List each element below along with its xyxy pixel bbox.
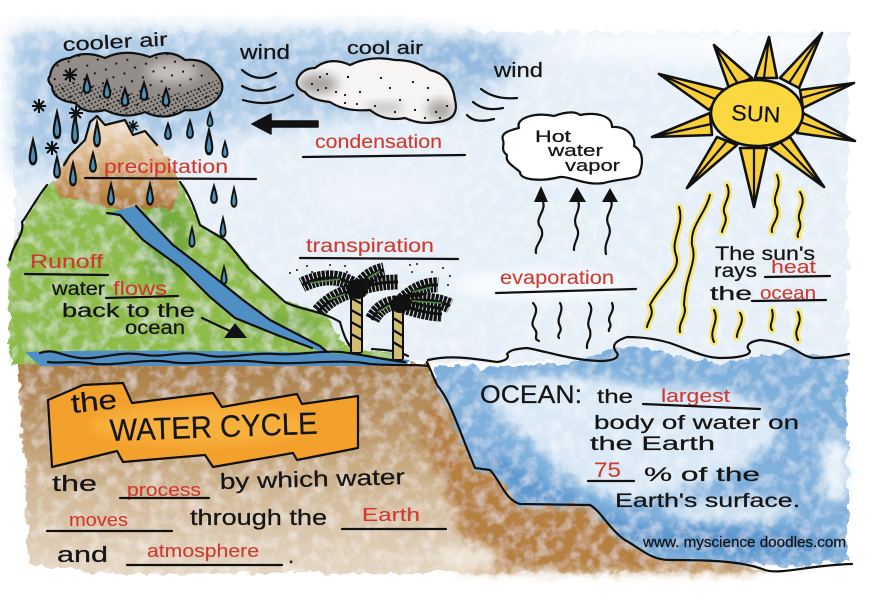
- text: water cycle definition: moves: [69, 510, 128, 530]
- panel: green mountain: [8, 116, 408, 366]
- text: the sun's rays heat the ocean: The sun's: [715, 244, 815, 265]
- text: the sun's rays heat the ocean: heat: [771, 257, 816, 277]
- text: the sun's rays heat the ocean: [710, 244, 830, 305]
- icon: palm trees: [289, 263, 451, 360]
- panel: ocean: [427, 337, 852, 571]
- text: water cycle definition: through the: [190, 505, 327, 530]
- text: water cycle definition: by which water: [219, 464, 405, 494]
- icon: wind lines right: [467, 89, 517, 121]
- palm trunk right: [393, 308, 403, 360]
- arrow: runoff direction: [202, 318, 247, 338]
- text: sun: SUN: [731, 100, 781, 128]
- text: water cycle definition: Earth: [362, 505, 420, 525]
- text: water flows back to the ocean: water: [51, 279, 106, 300]
- text: water cycle definition: .: [288, 543, 294, 568]
- text: the sun's rays heat the ocean: ocean: [760, 283, 816, 303]
- label: evaporation: evaporation: [500, 268, 614, 289]
- text: water cycle definition: and: [57, 542, 108, 567]
- text: ocean definition: the Earth: [590, 434, 715, 455]
- river: [107, 206, 330, 355]
- text: ocean definition: the: [597, 387, 633, 408]
- panel: soil: [18, 364, 770, 574]
- banner heading small: the: [69, 384, 118, 419]
- text: water flows back to the ocean: ocean: [125, 318, 185, 339]
- text: the sun's rays heat the ocean: rays: [714, 261, 757, 282]
- icon: sun heat rays: [647, 175, 803, 342]
- text: water cycle definition: process: [127, 480, 201, 500]
- text: the sun's rays heat the ocean: the: [710, 284, 752, 305]
- banner heading: WATER CYCLE: [109, 406, 318, 448]
- text: ocean definition: body of water on: [594, 413, 799, 434]
- icon: water vapor cloud: [503, 112, 642, 184]
- label: precipitation: precipitation: [104, 157, 228, 178]
- text: ocean definition: OCEAN:: [480, 381, 582, 409]
- icon: sun: [652, 33, 855, 207]
- text: ocean definition: % of the: [644, 465, 760, 486]
- text: hot water vapor: [535, 127, 620, 175]
- text: ocean definition: [480, 381, 800, 512]
- text: ocean definition: 75: [594, 459, 621, 482]
- text: hot water vapor: vapor: [565, 156, 620, 175]
- icon: wind lines left: [242, 70, 293, 103]
- label: cooler air: cooler air: [62, 29, 169, 56]
- label: wind left: wind: [239, 42, 290, 64]
- text: hot water vapor: water: [547, 141, 603, 160]
- text: water cycle definition: [47, 464, 446, 568]
- icon: dark rain cloud: [48, 53, 222, 117]
- label: runoff: Runoff: [30, 252, 104, 273]
- arrows: rising vapor: [534, 186, 618, 254]
- mountain outline: [64, 116, 157, 165]
- text: website: www. myscience doodles.com: [642, 534, 846, 551]
- icon: light cloud: [297, 58, 456, 123]
- text: water flows back to the ocean: [51, 279, 195, 339]
- banner: the water cycle: [48, 383, 358, 467]
- water strip: [25, 351, 428, 366]
- label: wind right: wind: [493, 60, 543, 82]
- text: water cycle definition: the: [52, 471, 97, 496]
- panel: sky background: [14, 29, 850, 362]
- evaporation squiggles: [532, 303, 613, 348]
- text: ocean definition: largest: [661, 386, 730, 406]
- label: evaporation: [496, 268, 636, 293]
- text: water flows back to the ocean: back to the: [62, 301, 195, 322]
- label: runoff: [25, 252, 108, 275]
- text: water cycle definition: atmosphere: [147, 541, 259, 561]
- label: transpiration: transpiration: [306, 236, 434, 257]
- palm trunk left: [351, 290, 362, 353]
- text: water flows back to the ocean: flows: [113, 279, 167, 300]
- text: hot water vapor: Hot: [535, 127, 571, 146]
- precipitation drops and snow: [30, 99, 237, 284]
- arrow: air moves left: [252, 114, 318, 134]
- label: condensation: condensation: [315, 132, 442, 153]
- label: cool air: cool air: [347, 38, 423, 58]
- mountain peak: [55, 116, 180, 208]
- palm fronds: [302, 270, 450, 320]
- text: ocean definition: Earth's surface.: [615, 491, 800, 512]
